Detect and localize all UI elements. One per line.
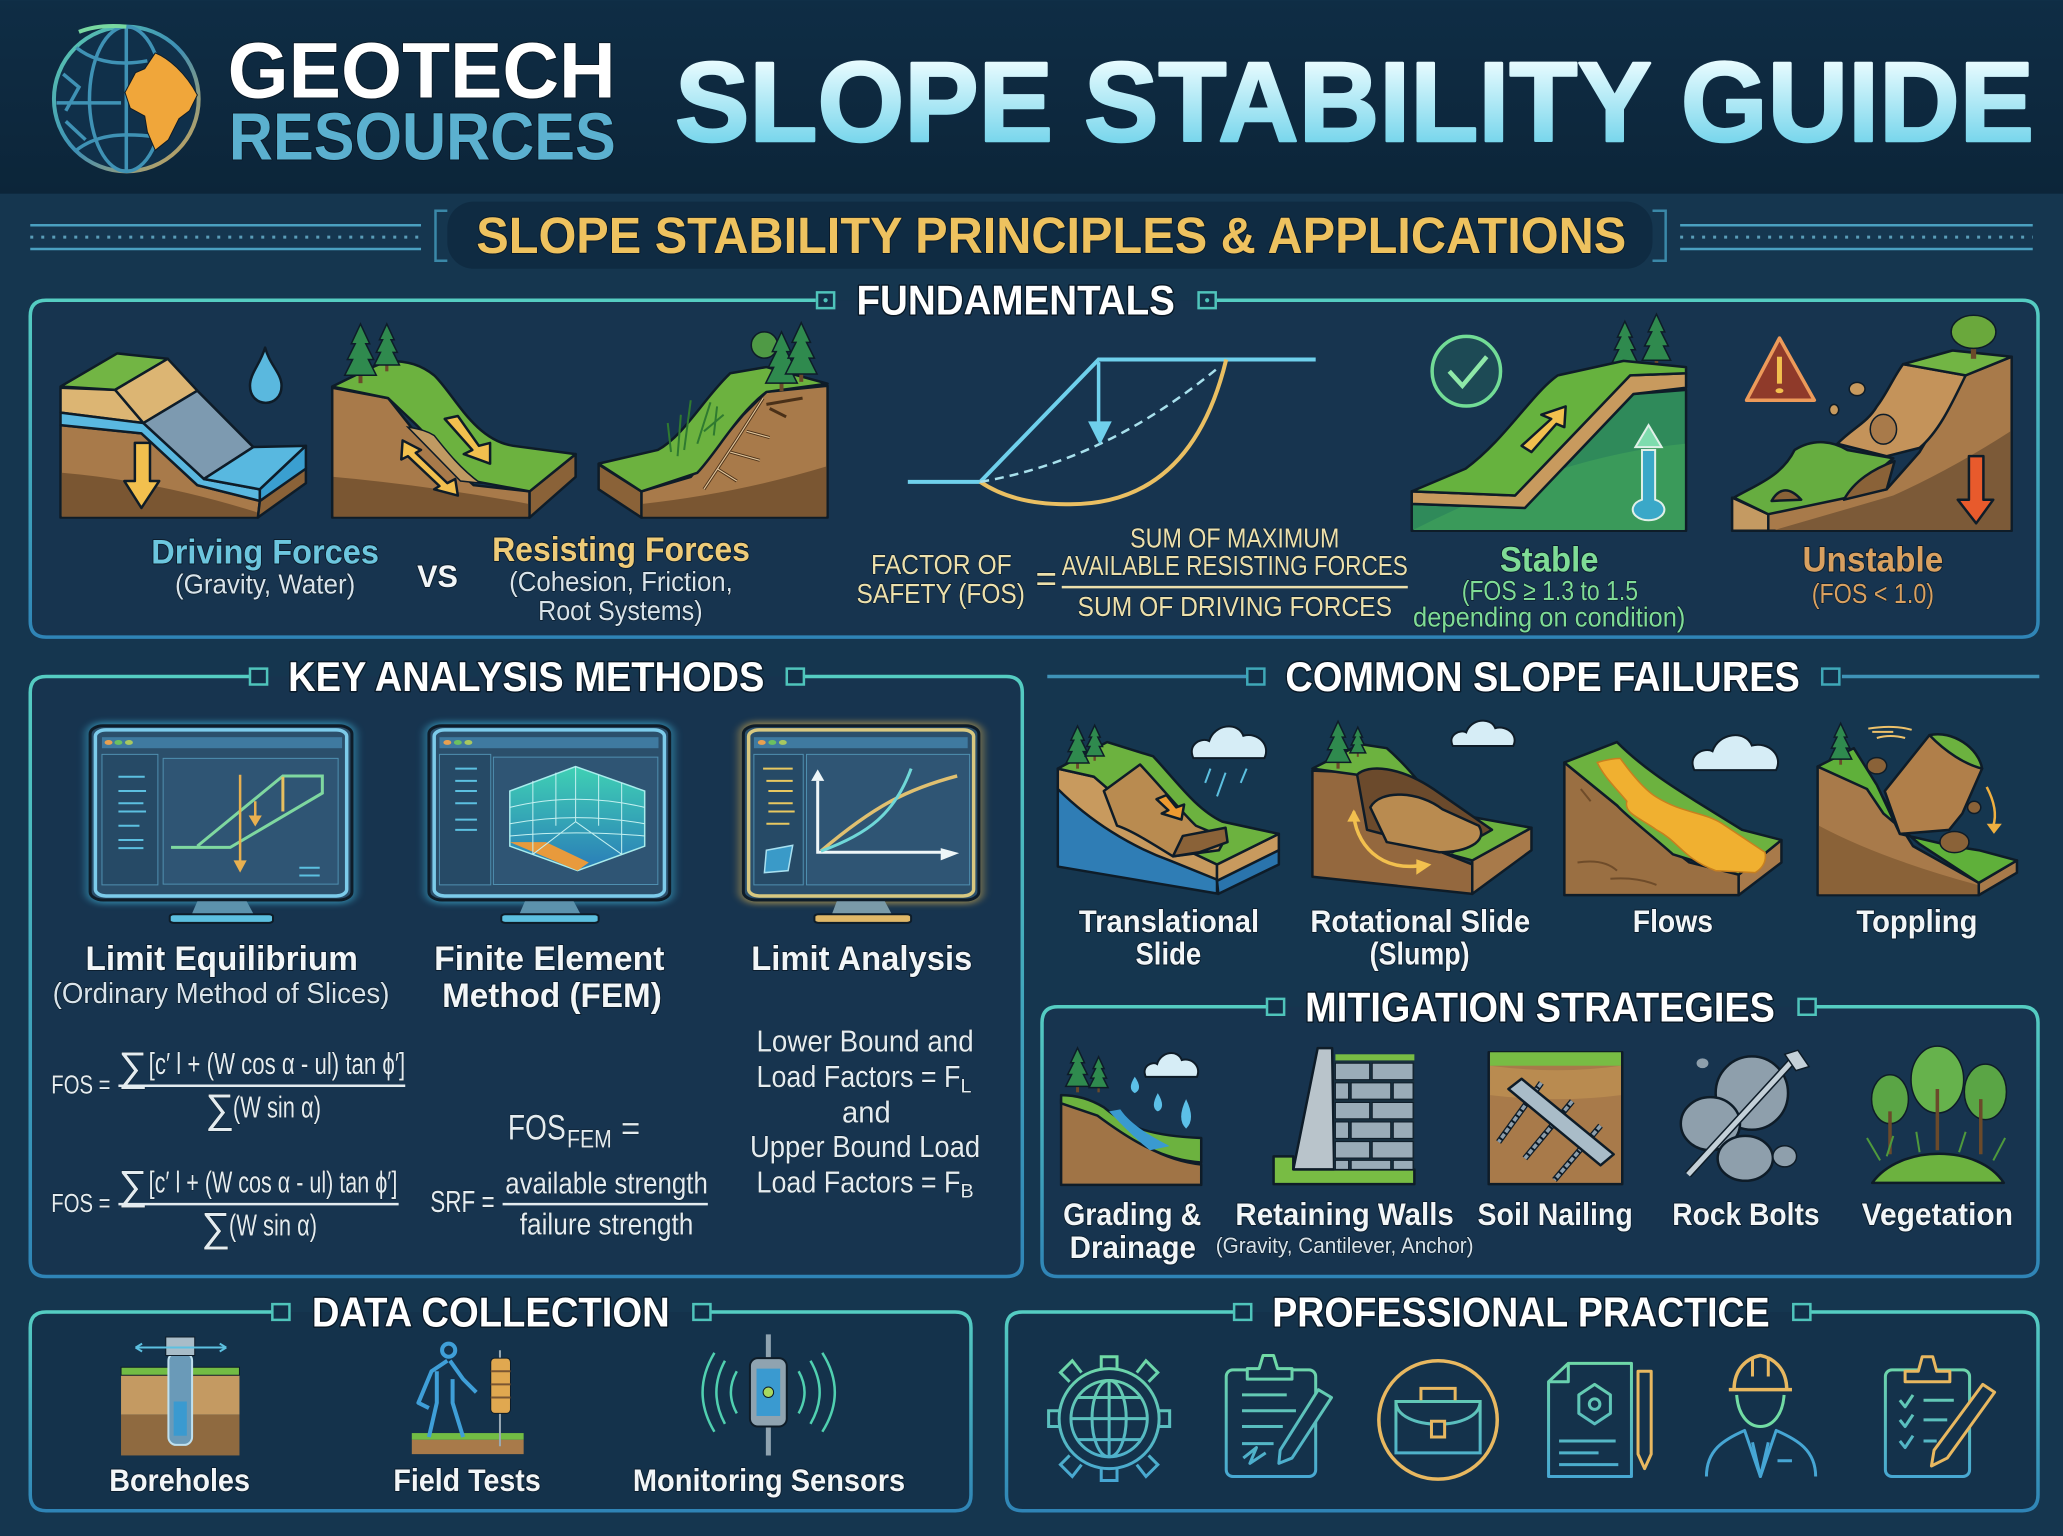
text: stable: Stable: [1500, 539, 1599, 579]
text: driving forces: (Gravity, Water): [175, 569, 355, 600]
diagram: slip circle: [908, 359, 1316, 504]
labels: mitigation: Drainage: [1070, 1229, 1196, 1265]
header band: [0, 0, 2063, 194]
labels: mitigation: [1063, 1196, 2013, 1265]
logo: wordmark: RESOURCES: [229, 99, 616, 174]
formula: factor of safety: SAFETY (FOS): [857, 578, 1025, 609]
formula: FOS second form: ∑: [201, 1204, 230, 1250]
labels: method names: Limit Equilibrium: [86, 940, 358, 978]
formula: FOS ordinary method: ∑: [118, 1043, 147, 1089]
title: SLOPE STABILITY GUIDE: [675, 39, 2034, 165]
labels: method names: Limit Analysis: [751, 940, 972, 978]
heading: key analysis methods: KEY ANALYSIS METHODS: [288, 653, 764, 700]
labels: method names: Method (FEM): [442, 977, 662, 1015]
formula: FOS ordinary method: (W sin α): [233, 1091, 321, 1124]
formula: FOS second form: ∑: [118, 1162, 147, 1208]
section: common slope failures: [1047, 653, 2039, 972]
formula: limit analysis bounds: and: [842, 1097, 891, 1130]
text: stable: [1413, 539, 1685, 633]
labels: failure types: Slide: [1135, 936, 1201, 972]
heading: professional practice: PROFESSIONAL PRACTICE: [1272, 1289, 1770, 1336]
trees and cloud on drainage: [1066, 1048, 1198, 1092]
formula: limit analysis bounds: L: [960, 1075, 971, 1097]
formula: FOS second form: [c′ l + (W cos α - ul) tan ϕ′]: [149, 1166, 397, 1199]
formula: limit analysis bounds: Load Factors = F: [757, 1166, 960, 1199]
labels: data collection: Field Tests: [393, 1462, 541, 1498]
trees on fundamentals slopes: [345, 314, 1671, 391]
icon: checklist with pencil: [1885, 1357, 1995, 1476]
icon: borehole: [121, 1337, 239, 1455]
text: unstable: Unstable: [1802, 539, 1943, 579]
illustration: translational slide: [1058, 742, 1279, 894]
labels: mitigation: Grading &: [1063, 1196, 1201, 1232]
labels: failure types: (Slump): [1370, 936, 1470, 972]
heading: fundamentals: FUNDAMENTALS: [857, 277, 1175, 324]
formula: FOS FEM: available strength: [505, 1168, 708, 1201]
formula: FOS second form: [51, 1162, 399, 1250]
formula: FOS FEM: =: [621, 1110, 640, 1147]
icon: clipboard notes: [1226, 1355, 1331, 1476]
panel: mitigation strategies: [1042, 983, 2038, 1277]
formula: FOS ordinary method: FOS =: [51, 1070, 111, 1100]
labels: data collection: Boreholes: [109, 1462, 250, 1498]
formula: factor of safety: FACTOR OF: [871, 549, 1012, 580]
icon: monitor limit analysis: [743, 726, 979, 923]
icon: monitor finite element: [429, 726, 670, 923]
labels: mitigation: Vegetation: [1862, 1196, 2013, 1232]
labels: mitigation: (Gravity, Cantilever, Anchor): [1216, 1233, 1474, 1258]
illustration: slope with sliding plane: [332, 361, 576, 518]
heading: mitigation strategies: MITIGATION STRATEGIES: [1305, 983, 1775, 1030]
labels: method names: Finite Element: [434, 940, 664, 978]
text: resisting forces: Root Systems): [538, 595, 703, 626]
formula: limit analysis bounds: Lower Bound and: [757, 1026, 974, 1059]
labels: data collection: Monitoring Sensors: [633, 1462, 905, 1498]
labels: mitigation: Soil Nailing: [1478, 1196, 1633, 1232]
formula: FOS FEM: FOS: [508, 1108, 566, 1148]
illustration: toppling: [1818, 727, 2017, 895]
text: driving forces: Driving Forces: [151, 533, 379, 571]
formula: FOS FEM: failure strength: [520, 1208, 693, 1241]
logo: wordmark: GEOTECH: [228, 27, 616, 115]
panel: professional practice: [1007, 1289, 2038, 1511]
text: resisting forces: [492, 531, 750, 626]
panel: fundamentals: [30, 277, 2038, 637]
formula: factor of safety: [857, 523, 1408, 622]
text: stable: (FOS ≥ 1.3 to 1.5: [1462, 575, 1638, 606]
trees and clouds on failure illustrations: [1066, 721, 1852, 770]
formula: FOS FEM: FEM: [567, 1126, 612, 1154]
formula: FOS second form: FOS =: [51, 1188, 111, 1218]
illustration: soil nailing: [1489, 1052, 1622, 1184]
heading: data collection: DATA COLLECTION: [312, 1289, 670, 1336]
text: stable: depending on condition): [1413, 602, 1685, 633]
formula: FOS ordinary method: [c′ l + (W cos α - ul) tan ϕ′]: [149, 1048, 405, 1081]
text: resisting forces: (Cohesion, Friction,: [509, 566, 733, 597]
labels: failure types: Rotational Slide: [1310, 903, 1530, 939]
logo: globe: [54, 26, 199, 171]
labels: data collection: [109, 1462, 905, 1498]
labels: method names: (Ordinary Method of Slices): [53, 978, 389, 1010]
icon: warning triangle: [1747, 338, 1814, 400]
formula: factor of safety: =: [1035, 558, 1057, 599]
subtitle text: SLOPE STABILITY PRINCIPLES & APPLICATIONS: [476, 207, 1626, 264]
formula: FOS ordinary method: ∑: [205, 1086, 234, 1132]
illustration: unstable slope: [1732, 315, 2012, 531]
formula: factor of safety: SUM OF MAXIMUM: [1130, 523, 1339, 554]
icon: check badge: [1432, 336, 1501, 406]
labels: failure types: Toppling: [1856, 903, 1977, 939]
labels: failure types: Flows: [1633, 903, 1713, 939]
labels: mitigation: Rock Bolts: [1672, 1196, 1820, 1232]
formula: factor of safety: SUM OF DRIVING FORCES: [1078, 591, 1392, 622]
panel: key analysis methods: [30, 653, 1022, 1277]
formula: factor of safety: AVAILABLE RESISTING FORCES: [1062, 550, 1408, 581]
panel: data collection: [30, 1289, 971, 1511]
illustration: grading and drainage: [1061, 1077, 1201, 1185]
formula: FOS second form: (W sin α): [229, 1210, 317, 1243]
icon: monitoring sensor: [703, 1334, 835, 1455]
logo: wordmark: [228, 27, 616, 174]
illustration: vegetation: [1867, 1046, 2006, 1183]
illustration: rock bolts: [1681, 1050, 1809, 1181]
illustration: retaining wall: [1274, 1048, 1414, 1184]
labels: mitigation: Retaining Walls: [1235, 1196, 1454, 1232]
formula: limit analysis bounds: Load Factors = F: [757, 1061, 960, 1094]
text: resisting forces: Resisting Forces: [492, 531, 750, 569]
text: driving forces: [151, 533, 379, 600]
text: vs: VS: [417, 558, 458, 594]
formula: FOS FEM: [430, 1108, 708, 1241]
formula: limit analysis bounds: B: [960, 1181, 974, 1203]
formula: FOS FEM: SRF =: [430, 1186, 495, 1219]
formula: limit analysis bounds: [750, 1026, 980, 1203]
illustration: flows: [1564, 742, 1781, 895]
icon: document with gear and pencil: [1549, 1363, 1651, 1476]
icon: gear globe: [1049, 1357, 1170, 1480]
labels: failure types: Translational: [1079, 903, 1259, 939]
subtitle banner: [30, 202, 2033, 269]
illustration: stable slope: [1412, 361, 1686, 531]
labels: failure types: [1079, 903, 1977, 972]
labels: method names: [53, 940, 972, 1015]
illustration: rotational slide: [1312, 744, 1531, 894]
text: unstable: (FOS < 1.0): [1812, 578, 1934, 609]
icon: field tests: [412, 1344, 524, 1454]
text: unstable: [1802, 539, 1943, 609]
formula: limit analysis bounds: Upper Bound Load: [750, 1131, 980, 1164]
heading: common slope failures: COMMON SLOPE FAILURES: [1285, 653, 1800, 700]
icon: briefcase in circle: [1379, 1361, 1497, 1479]
icon: engineer with hard hat: [1706, 1355, 1816, 1476]
formula: FOS ordinary method: [51, 1043, 405, 1132]
illustration: root-reinforced slope: [599, 367, 828, 518]
icon: monitor limit equilibrium: [90, 726, 352, 923]
illustration: driving forces block: [61, 348, 306, 518]
